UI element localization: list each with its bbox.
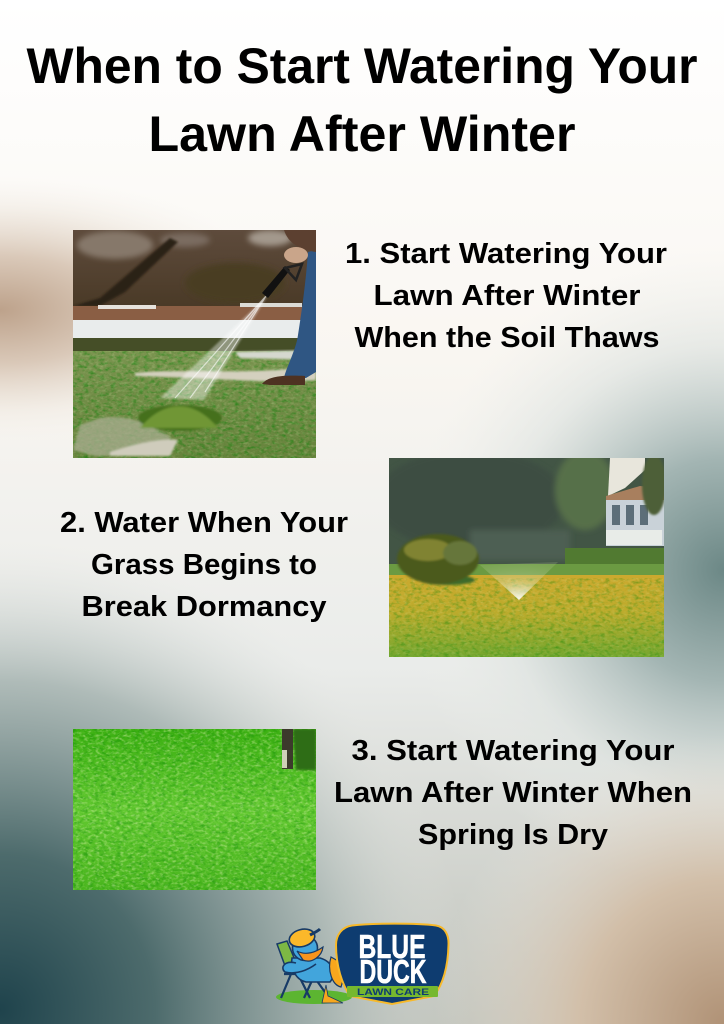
heading: step 2: Break Dormancy [82,591,326,623]
heading: step 2: 2. Water When Your [60,507,348,539]
heading: step 1: 1. Start Watering Your [345,238,667,270]
photo: hose watering thawing lawn [73,230,316,458]
icon: duck in lawn chair [276,926,352,1004]
badge: BLUE [358,928,426,965]
photo: green lawn [73,729,316,890]
heading: step 3 [334,735,692,851]
heading: step 3: Spring Is Dry [418,819,608,851]
water spray cone [480,562,558,600]
person [284,250,316,378]
heading: step 2: Grass Begins to [91,549,317,581]
heading: step 1 [345,238,667,354]
title [26,38,698,162]
hose nozzle [262,266,290,298]
logo: Blue Duck Lawn Care [276,924,449,1004]
badge [336,924,449,1004]
badge: DUCK [360,953,427,990]
photo: sprinkler on lawn [375,450,666,657]
heading: step 1: Lawn After Winter [374,280,640,312]
water spray [160,295,268,400]
heading: step 1: When the Soil Thaws [354,322,660,354]
heading: step 3: 3. Start Watering Your [352,735,674,767]
heading: step 3: Lawn After Winter When [334,777,692,809]
title: Lawn After Winter [148,106,576,162]
heading: step 2 [60,507,348,623]
badge: LAWN CARE [357,987,429,997]
title: When to Start Watering Your [26,38,698,94]
